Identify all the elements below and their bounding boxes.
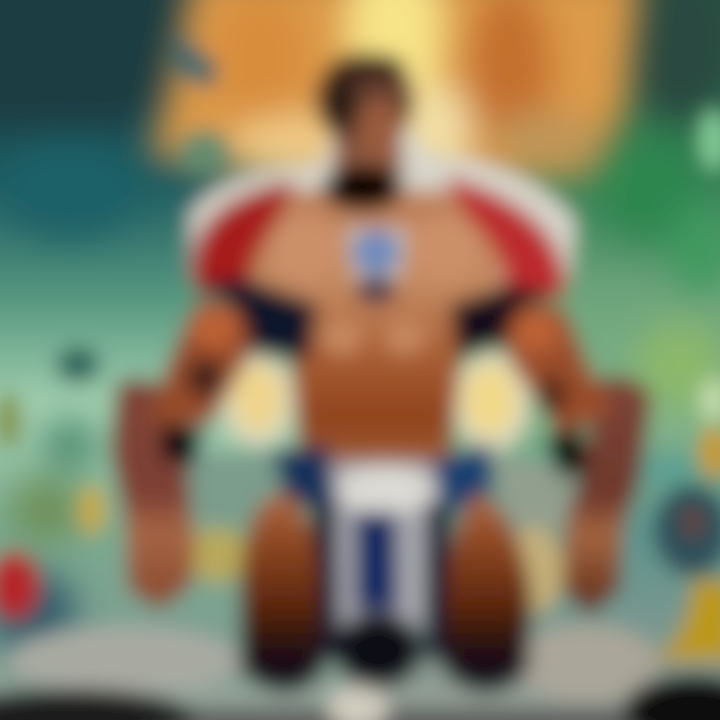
figure: left forearm: [150, 302, 255, 425]
foreground: objects at the lower corners: [0, 426, 720, 720]
background: small grey-green leaf shapes at the glow's edge: [0, 30, 720, 536]
background: bright openings beside the torso: [175, 352, 575, 614]
figure: dark underarm shadows: [200, 278, 555, 360]
background: fiery glow behind the head: [150, 0, 640, 185]
figure: right arm and hand: [562, 376, 652, 616]
figure: chest emblem: [345, 228, 408, 304]
figure: dark gap between the knees: [334, 612, 422, 688]
figure: left arm and hand: [110, 378, 195, 610]
figure: head: [315, 53, 415, 211]
figure: right forearm: [495, 304, 615, 435]
figure: forearm highlights and shadows: [187, 308, 568, 415]
figure: pale gap below the legs: [328, 686, 388, 720]
figure: wrist bands: [160, 422, 590, 478]
figure: pale aura around shoulders: [190, 125, 575, 280]
figure: legs: [240, 493, 532, 693]
figure: shorts: [272, 442, 494, 625]
figure: red shoulder pads: [192, 175, 566, 302]
figure: leg shadows beside the shorts: [312, 500, 450, 660]
figure: pectoral and abdominal highlights: [269, 216, 481, 354]
figure: hero: [110, 53, 652, 720]
figure: torso: [248, 190, 505, 462]
